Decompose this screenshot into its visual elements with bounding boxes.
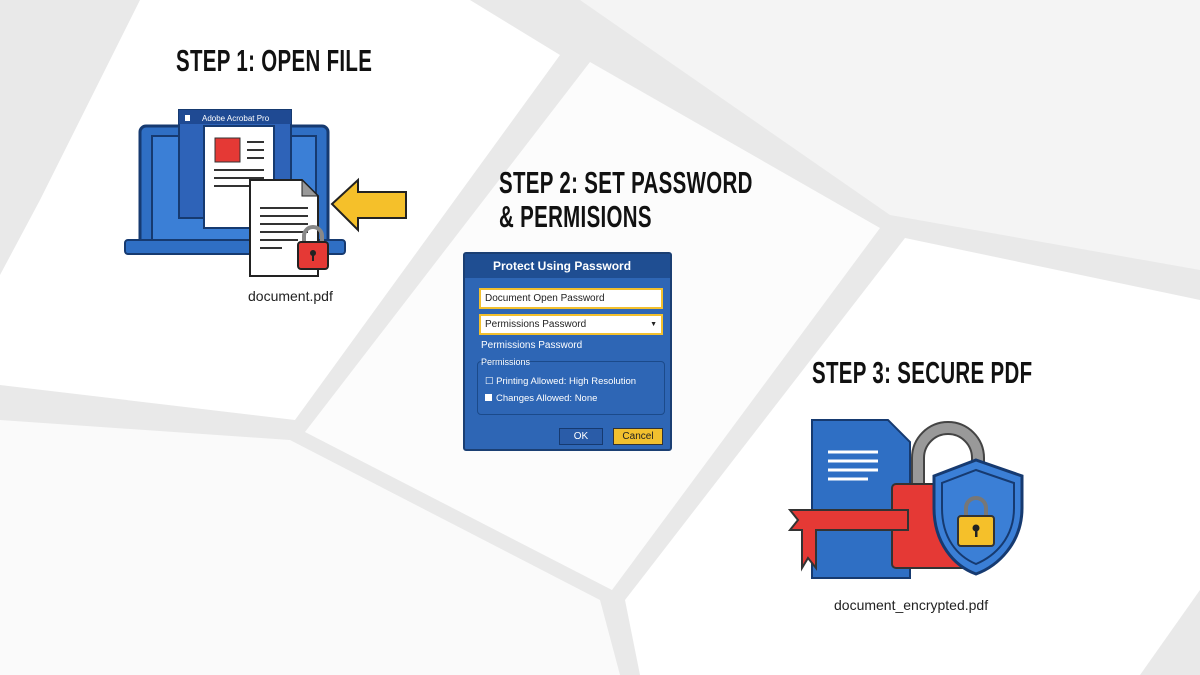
title: step 2: STEP 2: SET PASSWORD	[499, 165, 753, 200]
dialog: protect using password: Protect Using Password	[493, 259, 631, 273]
dialog: protect using password: Permissions Password	[481, 340, 582, 351]
title: step 2	[499, 165, 753, 234]
label: document_encrypted.pdf: document_encrypted.pdf	[834, 597, 988, 613]
dialog: protect using password	[463, 252, 672, 451]
icon: laptop with acrobat and locked document	[124, 109, 407, 277]
icon: secure pdf with lock, shield, ribbon	[788, 419, 1024, 579]
title: step 2: & PERMISIONS	[499, 199, 652, 234]
title: step 1: STEP 1: OPEN FILE	[176, 43, 372, 78]
title: step 3: STEP 3: SECURE PDF	[812, 355, 1032, 390]
dialog: protect using password: Permissions Password	[485, 319, 586, 330]
label: document.pdf: document.pdf	[248, 288, 333, 304]
dialog: protect using password: Permissions	[481, 357, 530, 367]
dialog: protect using password: OK	[574, 431, 588, 442]
dialog: protect using password: ▼	[650, 321, 657, 328]
dialog: protect using password: Cancel	[622, 431, 654, 442]
dialog: protect using password: ☐ Printing Allowed: High Resolution	[485, 376, 636, 387]
dialog: protect using password: Document Open Password	[485, 293, 605, 304]
dialog: protect using password: Changes Allowed: None	[496, 393, 597, 404]
icon: laptop with acrobat and locked document: Adobe Acrobat Pro	[202, 114, 270, 123]
